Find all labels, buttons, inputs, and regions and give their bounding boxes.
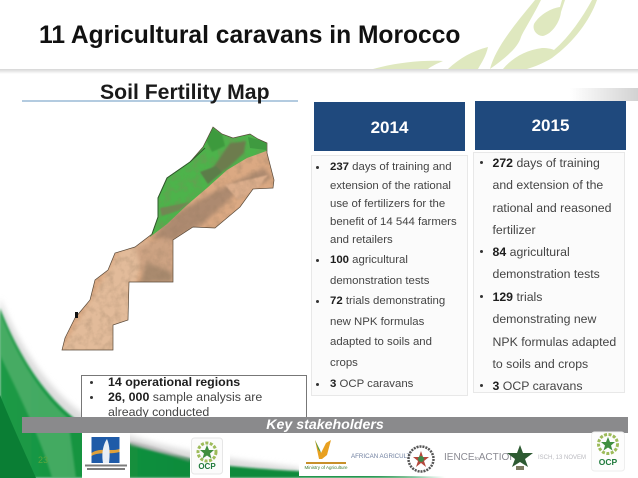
header: 2014 (314, 102, 465, 151)
logo: OCP right: OCP (599, 457, 618, 467)
panel: 2014 list: adapted to soils and (330, 336, 432, 348)
header: 2014: 2014 (371, 118, 408, 137)
logo: OCP (190, 433, 230, 478)
panel: 2015 list: NPK formulas adapted (492, 335, 616, 349)
logo: ministry (82, 433, 130, 478)
callout: regions and samples: 26, 000 sample analysis are (108, 390, 262, 404)
panel: 2014 list: use of fertilizers for the (330, 198, 445, 210)
logos strip: partners: Ministry of Agriculture (304, 465, 348, 470)
logo: OCP: OCP (198, 462, 216, 471)
panel: 2014 list: 3 OCP caravans (330, 378, 413, 390)
logos strip: partners (299, 433, 638, 476)
panel: 2014 list: 72 trials demonstrating (330, 295, 445, 307)
panel: 2014 list: 237 days of training and (330, 161, 452, 173)
title: 11 Agricultural caravans in Morocco (39, 22, 460, 49)
panel: 2015 list: demonstrating new (492, 312, 596, 326)
panel: 2015 list: 129 trials (492, 290, 542, 304)
panel: 2014 list: 100 agricultural (330, 254, 408, 266)
logo: OCP right (591, 432, 625, 472)
header: 2015 (475, 101, 626, 150)
panel: 2015 list: demonstration tests (492, 267, 600, 281)
callout: regions and samples (81, 375, 307, 417)
panel: 2014 list: extension of the rational (330, 180, 451, 192)
panel: 2015 list: and extension of the (492, 178, 603, 192)
heading: soil fertility map: Soil Fertility Map (100, 81, 270, 104)
logos strip: partners: ISCH, 13 NOVEM (538, 455, 586, 461)
panel: 2015 list: rational and reasoned (492, 201, 611, 215)
panel: 2014 list: new NPK formulas (330, 316, 424, 328)
banner: key stakeholders: Key stakeholders (266, 417, 384, 433)
panel: 2014 list: crops (330, 357, 358, 369)
panel: 2015 list (473, 152, 625, 393)
panel: 2015 list: fertilizer (492, 223, 536, 237)
panel: 2014 list: and retailers (330, 234, 393, 246)
page number: 23 (38, 455, 48, 465)
panel: 2014 list: benefit of 14 544 farmers (330, 216, 457, 228)
logos strip: partners: IENCEtoACTIOI (444, 452, 512, 463)
panel: 2015 list: 3 OCP caravans (492, 379, 582, 393)
header: 2015: 2015 (532, 116, 569, 135)
panel: 2015 list: to soils and crops (492, 357, 588, 371)
map of Morocco (62, 126, 274, 350)
logos strip: partners: AFRICAN AGRICULTU (351, 453, 415, 460)
panel: 2015 list: 272 days of training (492, 156, 600, 170)
panel: 2015 list: 84 agricultural (492, 245, 570, 259)
callout: regions and samples: 14 operational regions (108, 375, 240, 389)
panel: 2014 list: demonstration tests (330, 275, 429, 287)
banner: key stakeholders (22, 417, 628, 432)
panel: 2014 list (311, 155, 468, 396)
